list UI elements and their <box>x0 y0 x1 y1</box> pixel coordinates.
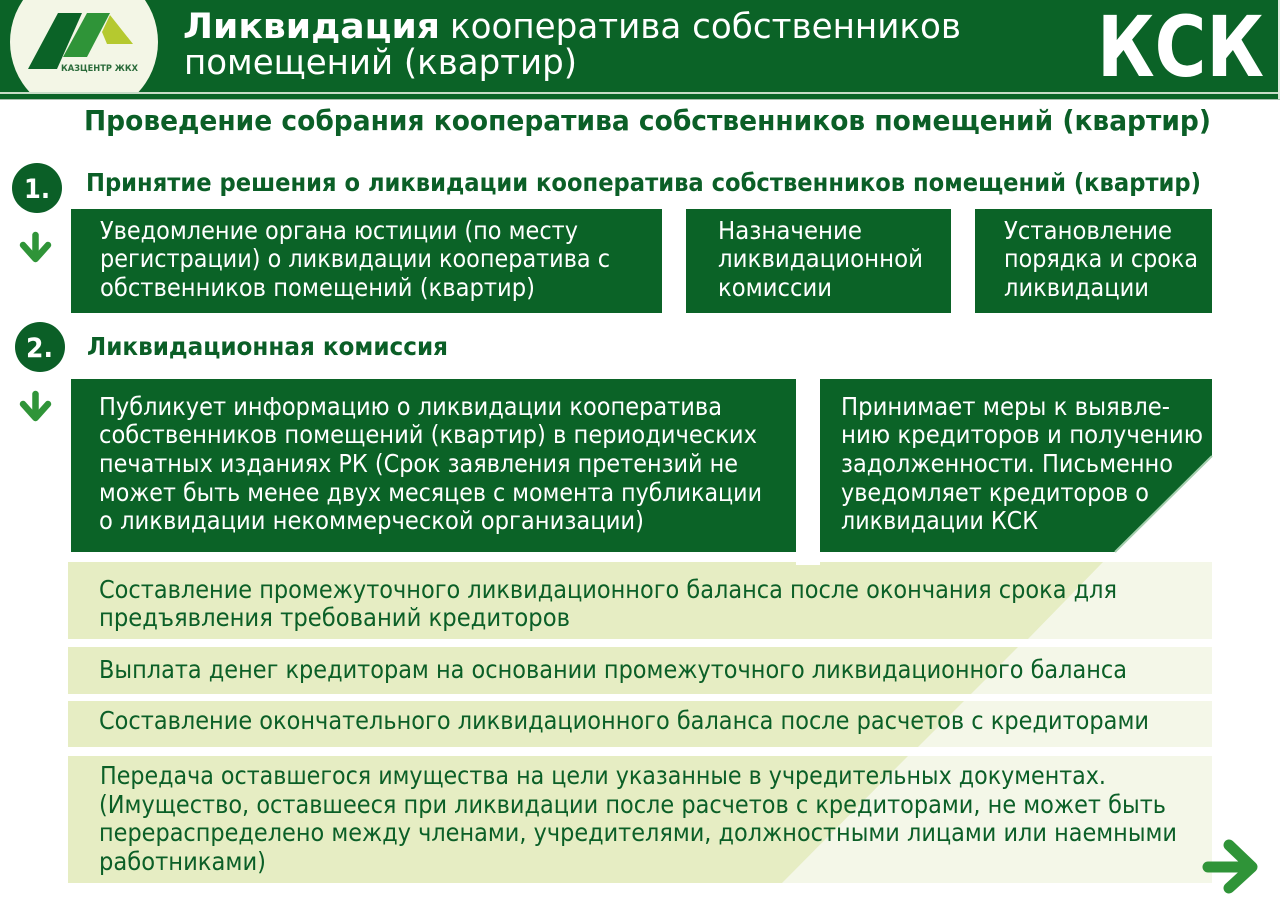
step 2 heading: Ликвидационная комиссия <box>87 332 448 361</box>
panel: set procedure and term: порядка и срока <box>1004 244 1198 273</box>
panel: creditors <box>820 379 1212 552</box>
panel: final balance <box>68 701 1212 747</box>
panel: appoint commission: Назначение <box>718 216 862 245</box>
panel: creditors: Принимает меры к выявле- <box>841 392 1170 421</box>
subtitle: Проведение собрания кооператива собственников помещений (квартир) <box>84 104 1211 137</box>
panel: payment to creditors <box>68 647 1212 694</box>
logo: Казцентр ЖКХ: КАЗЦЕНТР ЖКХ <box>61 64 138 74</box>
panel: creditors: задолженности. Письменно <box>841 449 1173 478</box>
panel: payment to creditors: Выплата денег кредиторам на основании промежуточного ликвидационного баланса <box>99 655 1127 684</box>
panel: set procedure and term: ликвидации <box>1004 273 1149 302</box>
panel: remaining property <box>68 756 1212 883</box>
panel: set procedure and term: Установление <box>1004 216 1172 245</box>
panel: creditors: уведомляет кредиторов о <box>841 478 1149 507</box>
title <box>183 7 961 83</box>
panel: interim balance: Составление промежуточного ликвидационного баланса после окончания срока для <box>99 575 1117 604</box>
panel: interim balance <box>68 552 1212 639</box>
panel: appoint commission <box>686 209 951 313</box>
panel: appoint commission: ликвидационной <box>718 244 923 273</box>
panel: remaining property: Передача оставшегося имущества на цели указанные в учредительных документах. <box>100 761 1106 790</box>
panel: notify justice body: Уведомление органа юстиции (по месту <box>100 216 578 245</box>
step 2 marker <box>15 322 65 372</box>
step 1 heading: Принятие решения о ликвидации кооператива собственников помещений (квартир) <box>86 168 1201 197</box>
step 1 marker <box>12 163 62 213</box>
panel: publication <box>71 379 796 552</box>
title: помещений (квартир) <box>184 43 577 83</box>
panel: publication: может быть менее двух месяцев с момента публикации <box>99 478 762 507</box>
title: Ликвидация <box>183 7 440 47</box>
panel: publication: о ликвидации некоммерческой организации) <box>99 506 644 535</box>
panel: remaining property: работниками) <box>99 847 266 876</box>
panel: publication: собственников помещений (квартир) в периодических <box>99 420 757 449</box>
panel: notify justice body: обственников помещений (квартир) <box>100 273 535 302</box>
panel: remaining property: (Имущество, оставшееся при ликвидации после расчетов с кредиторами, не может быть <box>99 790 1166 819</box>
panel: creditors: нию кредиторов и получению <box>841 420 1203 449</box>
header band <box>0 0 1280 100</box>
panel: set procedure and term <box>975 209 1212 313</box>
panel: publication: Публикует информацию о ликвидации кооператива <box>99 392 722 421</box>
panel: appoint commission: комиссии <box>718 273 832 302</box>
panel: interim balance: предъявления требований кредиторов <box>99 603 570 632</box>
icon: down arrow 1 <box>23 235 48 259</box>
icon: next arrow <box>1208 845 1252 888</box>
panel: creditors: ликвидации КСК <box>841 506 1038 535</box>
title: кооператива собственников <box>450 7 961 47</box>
step 1 marker: 1. <box>24 174 50 205</box>
panel: remaining property: перераспределено между членами, учредителями, должностными лицами или наемными <box>99 818 1177 847</box>
logo: Казцентр ЖКХ <box>10 0 158 92</box>
panel: final balance: Составление окончательного ликвидационного баланса после расчетов с кредиторами <box>99 706 1149 735</box>
panel: notify justice body: регистрации) о ликвидации кооператива с <box>100 244 610 273</box>
panel: notify justice body <box>71 209 662 313</box>
step 2 marker: 2. <box>26 333 53 364</box>
icon: down arrow 2 <box>23 394 48 418</box>
panel: publication: печатных изданиях РК (Срок заявления претензий не <box>99 449 738 478</box>
